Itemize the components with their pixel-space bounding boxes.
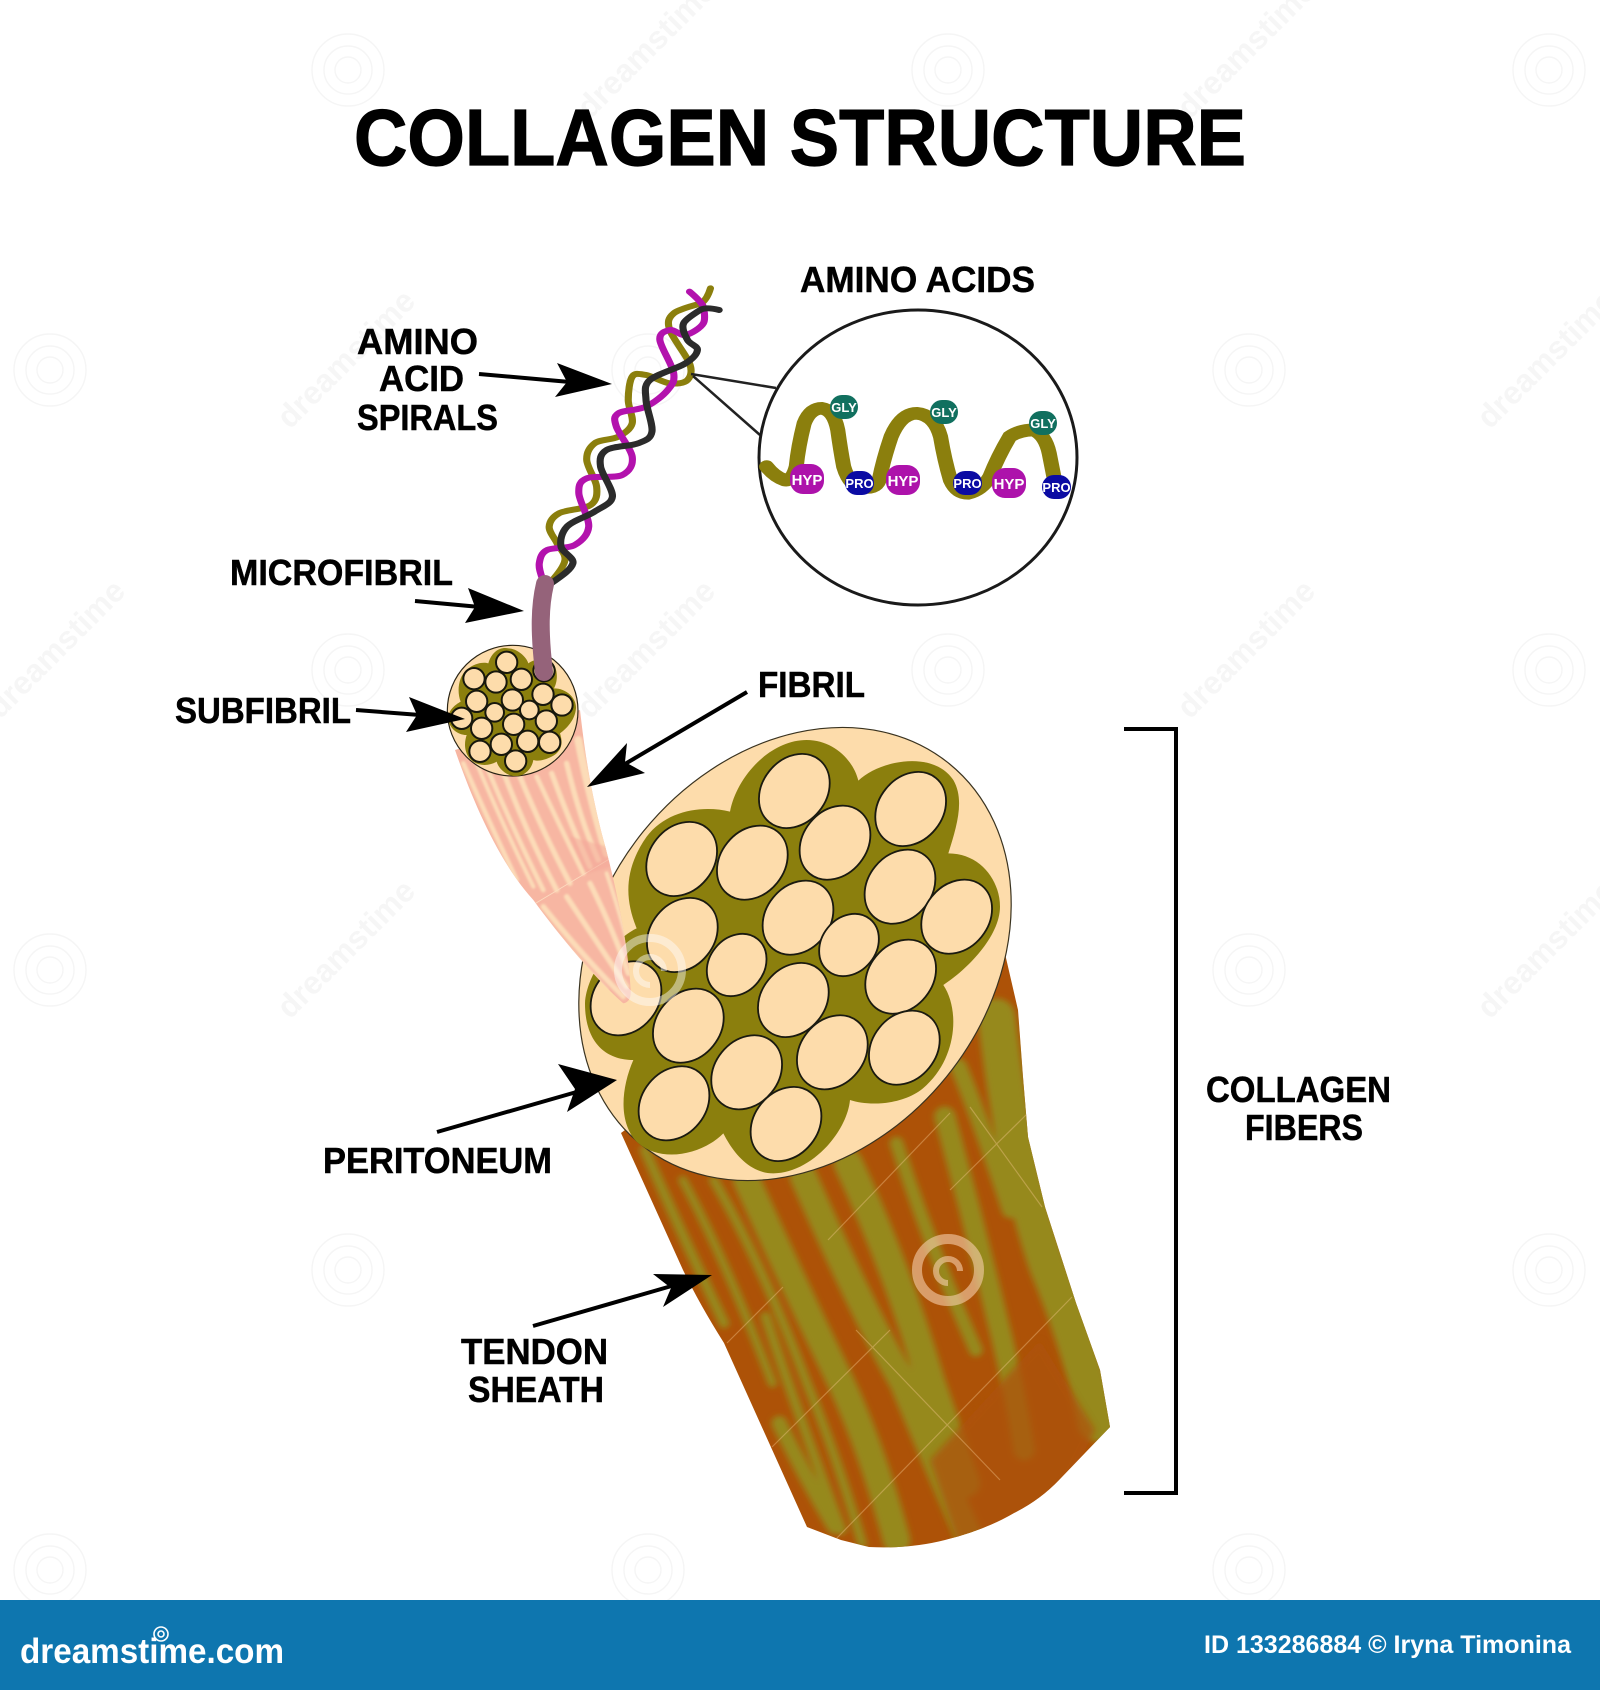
logo spiral xyxy=(154,1627,168,1641)
residue PRO 3: PRO xyxy=(1042,480,1071,495)
label: amino acid spirals: ACID xyxy=(379,358,464,399)
residue HYP 1: HYP xyxy=(792,472,822,489)
residue GLY 3: GLY xyxy=(1030,416,1056,431)
residue PRO 1: PRO xyxy=(845,476,874,491)
label: amino acid spirals: AMINO xyxy=(357,321,478,362)
label: tendon sheath: SHEATH xyxy=(468,1369,604,1410)
peritoneum disc xyxy=(489,641,1101,1267)
amino acid chain xyxy=(767,408,1055,493)
heading: amino acids: AMINO ACIDS xyxy=(800,259,1035,300)
title: COLLAGEN STRUCTURE xyxy=(354,93,1246,182)
label: collagen fibers: COLLAGEN xyxy=(1206,1069,1391,1110)
label: fibril: FIBRIL xyxy=(758,664,865,705)
residue PRO 3 xyxy=(1042,475,1071,499)
fibril olive matrix xyxy=(448,648,576,776)
rust shading on lower right xyxy=(928,1362,1096,1538)
residue HYP 2: HYP xyxy=(888,473,918,490)
label: subfibril: SUBFIBRIL xyxy=(175,690,351,731)
collagen fiber cross-section xyxy=(489,641,1101,1267)
magnifier lines xyxy=(691,374,776,435)
residue GLY 3 xyxy=(1029,411,1057,435)
label: tendon sheath: TENDON xyxy=(461,1331,608,1372)
fibril disc xyxy=(447,645,578,776)
label: peritoneum: PERITONEUM xyxy=(323,1140,552,1181)
panel: amino acids magnifier xyxy=(759,310,1077,605)
watermark pattern: dreamstime xyxy=(269,282,422,435)
credit text: ID 133286884 © Iryna Timonina xyxy=(1204,1631,1572,1659)
residue GLY 1: GLY xyxy=(831,400,857,415)
label: collagen fibers: FIBERS xyxy=(1245,1107,1363,1148)
residue GLY 2 xyxy=(930,400,958,424)
label: collagen fibers xyxy=(1206,1069,1391,1148)
arrow: amino acid spirals xyxy=(479,363,612,397)
label: tendon sheath xyxy=(461,1331,608,1410)
faint grid lines xyxy=(727,1107,1072,1540)
arrow: microfibril xyxy=(415,588,524,623)
subfibrils xyxy=(451,652,573,772)
arrow: fibril xyxy=(587,692,747,787)
magenta strand xyxy=(539,292,705,582)
label: microfibril: MICROFIBRIL xyxy=(230,552,453,593)
subfibril cross-section xyxy=(447,645,578,776)
label: amino acid spirals xyxy=(357,321,498,438)
watermark pattern: dreamstime xyxy=(269,872,422,1025)
footer band xyxy=(0,1600,1600,1690)
tendon sheath bundle xyxy=(621,956,1110,1548)
residue GLY 1 xyxy=(830,395,858,419)
watermark spiral on fibril tip xyxy=(618,938,682,1002)
olive strand xyxy=(549,288,710,582)
residue HYP 3: HYP xyxy=(994,476,1024,493)
black strand xyxy=(551,308,719,583)
residue HYP 2 xyxy=(886,465,920,495)
residue PRO 1 xyxy=(845,471,874,495)
bracket: collagen fibers xyxy=(1124,729,1176,1493)
watermark pattern: dreamstime xyxy=(1169,572,1322,725)
microfibril strand xyxy=(541,584,545,672)
watermark pattern: dreamstime xyxy=(569,572,722,725)
residue PRO 2 xyxy=(953,471,982,495)
fiber bundles xyxy=(576,740,1007,1175)
residue HYP 1 xyxy=(790,464,824,494)
lens circle xyxy=(759,310,1077,605)
logo text: dreamstime.com xyxy=(20,1632,284,1671)
arrow: subfibril xyxy=(356,697,465,732)
amino acid spirals helix xyxy=(539,288,719,583)
olive matrix xyxy=(585,740,1000,1173)
fibril cone xyxy=(455,710,631,1004)
watermark spiral on sheath xyxy=(917,1239,979,1301)
arrow: tendon sheath xyxy=(533,1274,712,1326)
residue GLY 2: GLY xyxy=(931,405,957,420)
residue PRO 2: PRO xyxy=(953,476,982,491)
residue HYP 3 xyxy=(992,468,1026,498)
label: amino acid spirals: SPIRALS xyxy=(357,397,498,438)
arrow: peritoneum xyxy=(437,1064,617,1132)
